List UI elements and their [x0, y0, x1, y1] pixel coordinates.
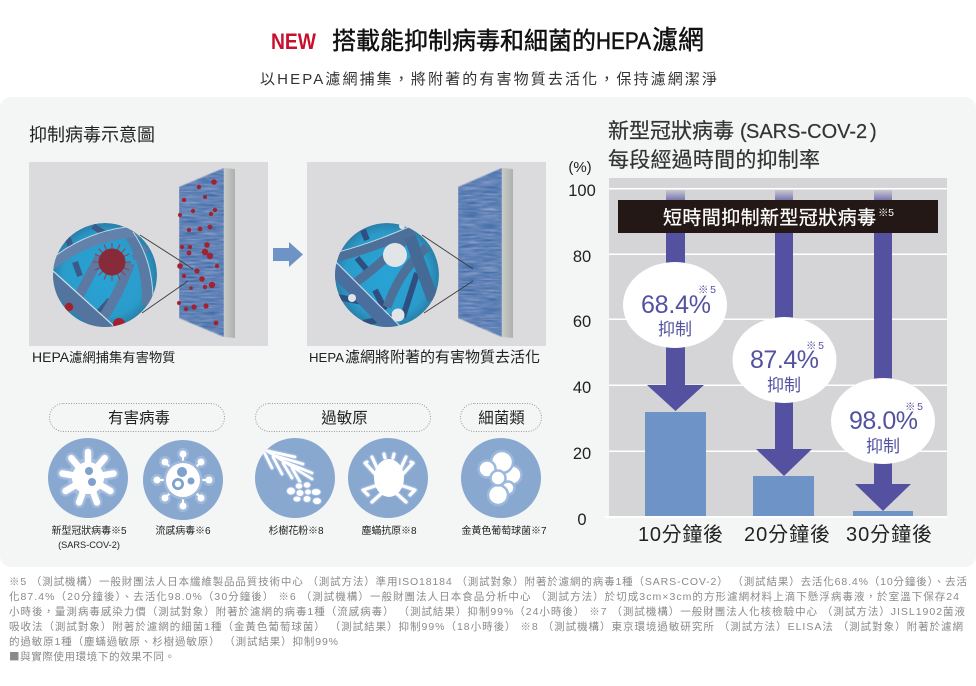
- title: 搭載能抑制病毒和細菌的: [332, 28, 596, 55]
- x axis labels: 30分鐘後: [846, 523, 932, 546]
- callout: 98.0%: ※5: [905, 401, 923, 413]
- icon: cedar pollen: [255, 438, 335, 518]
- category pill: bacteria: 細菌類: [478, 409, 525, 427]
- zoom lines: [422, 235, 473, 313]
- banner: ※5: [878, 207, 894, 219]
- footnotes: 吸收法（測試對象）附著於濾網的細菌1種（金黃色葡萄球菌） （測試結果）抑制99%（18小時後） ※8 （測試機構）東京環境過敏研究所 （測試方法）ELISA法 （測試對象）附著於濾網: [9, 620, 963, 633]
- x axis labels: 10分鐘後: [638, 523, 723, 546]
- y axis labels: 100: [568, 182, 596, 200]
- label: influenza: 流感病毒※6: [156, 524, 211, 537]
- panel: main background: [0, 97, 976, 567]
- panel: filter deactivating substances: [307, 162, 546, 346]
- label: staphylococcus: 金黃色葡萄球菌※7: [462, 524, 547, 537]
- bar: 20 min: [753, 476, 814, 516]
- caption: left image: HEPA濾網捕集有害物質: [32, 349, 175, 365]
- label: SARS-COV-2: (SARS-COV-2): [58, 540, 120, 550]
- footnotes: ■與實際使用環境下的效果不同。: [9, 649, 175, 664]
- banner: [618, 200, 938, 233]
- title: HEPA: [596, 28, 651, 55]
- icon: staphylococcus: [461, 438, 541, 518]
- title: [271, 25, 704, 55]
- icon: HEPA filter with viruses: [177, 168, 235, 338]
- bar: 30 min: [853, 511, 913, 516]
- callout: 68.4%: ※5: [698, 284, 716, 296]
- icon: influenza virus: [143, 440, 223, 520]
- zoom lines: [140, 235, 193, 313]
- label: dust mite: 塵蟎抗原※8: [362, 524, 417, 537]
- footnotes: 的過敏原1種（塵蟎過敏原、杉樹過敏原） （測試結果）抑制99%: [9, 635, 338, 648]
- label: SARS-COV-2: [52, 524, 127, 550]
- chart title: ): [870, 121, 877, 143]
- icon: dust mite: [348, 438, 428, 518]
- y axis labels: 20: [573, 445, 591, 463]
- callout: 87.4%: 87.4%: [750, 346, 819, 374]
- callout: 98.0%: 抑制: [866, 437, 900, 456]
- icon: magnified fibres with virus: [49, 223, 157, 332]
- arrow: 30 min: [855, 190, 911, 511]
- category pill: harmful viruses: 有害病毒: [108, 409, 170, 427]
- callout: 68.4%: [623, 262, 727, 348]
- icon: coronavirus: [48, 438, 128, 518]
- chart title: 新型冠狀病毒: [608, 120, 734, 143]
- x axis labels: [638, 523, 932, 546]
- footnotes: ※5 （測試機構）一般財團法人日本纖維製品品質技術中心 （測試方法）準用ISO18184 （測試對象）附著於濾網的病毒1種（SARS-COV-2） （測試結果）去活化68.4%（10分鐘後）、去活: [9, 575, 968, 588]
- title: NEW: [271, 29, 316, 54]
- footnotes: 化87.4%（20分鐘後）、去活化98.0%（30分鐘後） ※6 （測試機構）一般財團法人日本食品分析中心 （測試方法）於切成3cm×3cm的方形濾網材料上滴下懸浮病毒液，於室溫下保存24: [9, 590, 959, 603]
- category pill: harmful viruses: [50, 404, 224, 432]
- subtitle: 以HEPA濾網捕集，將附著的有害物質去活化，保持濾網潔淨: [260, 70, 717, 88]
- category pill: allergens: [256, 404, 430, 432]
- title: 濾網: [652, 25, 704, 55]
- icon: magnified fibres with deactivated particles: [333, 223, 439, 330]
- callout: 87.4%: 抑制: [767, 376, 801, 395]
- chart title: SARS-COV-2: [746, 121, 867, 143]
- category pill: bacteria: [460, 404, 542, 432]
- label: SARS-COV-2: 新型冠狀病毒※5: [52, 524, 127, 537]
- y axis labels: 0: [577, 511, 587, 529]
- heading: suppression diagram: 抑制病毒示意圖: [29, 125, 155, 145]
- category pill: allergens: 過敏原: [321, 409, 368, 427]
- bar: 10 min: [645, 412, 706, 516]
- callout: 98.0%: [831, 378, 935, 464]
- y axis labels: 80: [573, 248, 591, 266]
- callout: 87.4%: [732, 317, 836, 403]
- chart title: (: [740, 121, 747, 143]
- callout: 68.4%: 抑制: [658, 320, 692, 339]
- y axis labels: (%): [568, 159, 592, 176]
- bar chart: suppression over time: [568, 159, 947, 546]
- callout: 98.0%: 98.0%: [849, 407, 918, 435]
- chart title: [608, 120, 877, 172]
- footnotes: 小時後，量測病毒感染力價（測試對象）附著於濾網的病毒1種（流感病毒） （測試結果）抑制99%（24小時後） ※7 （測試機構）一般財團法人化核檢驗中心 （測試方法）JISL1902菌液: [9, 605, 966, 618]
- callout: 87.4%: ※5: [806, 340, 824, 352]
- arrow: 20 min: [756, 190, 812, 476]
- chart title: 每段經過時間的抑制率: [608, 149, 820, 172]
- arrow: 10 min: [647, 190, 704, 411]
- icon: clean HEPA filter: [458, 168, 513, 338]
- y axis labels: 40: [573, 379, 591, 397]
- caption: right image: 濾網將附著的有害物質去活化: [345, 348, 540, 366]
- label: cedar pollen: 杉樹花粉※8: [268, 524, 324, 537]
- callout: 68.4%: 68.4%: [641, 291, 711, 319]
- footnotes: [9, 575, 968, 664]
- y axis labels: 60: [573, 313, 591, 331]
- x axis labels: 20分鐘後: [744, 523, 830, 546]
- banner: 短時間抑制新型冠狀病毒: [663, 207, 876, 229]
- arrow: process direction: [273, 242, 303, 267]
- caption: right image: HEPA: [309, 350, 344, 365]
- y axis labels: [568, 159, 596, 529]
- panel: filter capturing harmful substances: [29, 162, 268, 346]
